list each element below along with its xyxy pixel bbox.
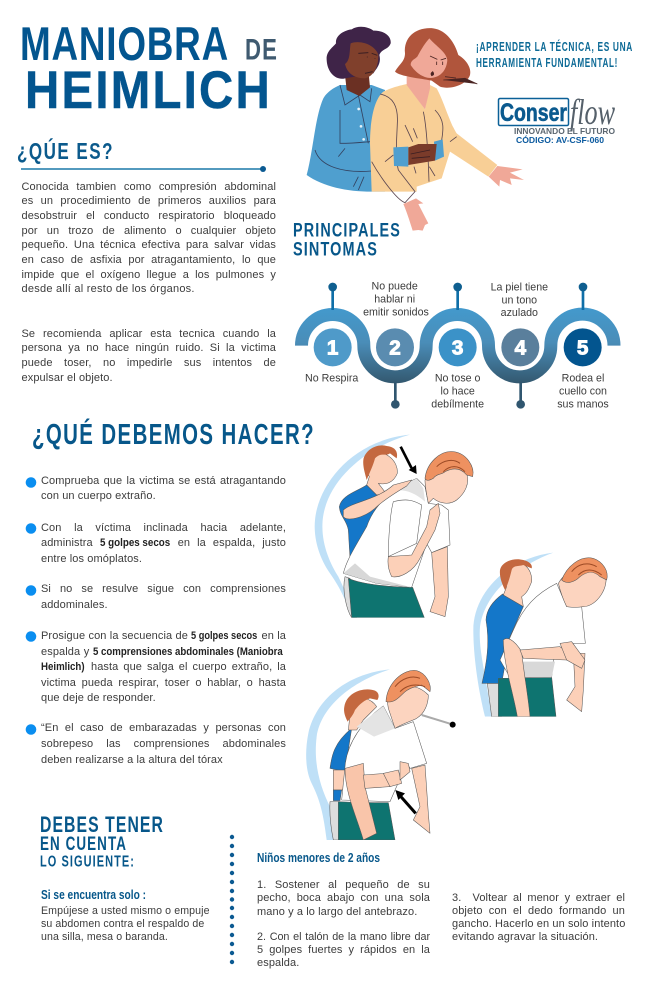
- step 3 text: [41, 583, 286, 611]
- text: alone: su abdomen contra el respaldo de: [41, 918, 204, 930]
- text: definition: por un trozo de alimento o cualquier objeto: [22, 225, 276, 237]
- chart: five symptoms timeline: Rodea el: [562, 373, 604, 385]
- step 5 text: [41, 722, 286, 766]
- step 1 text: Comprueba que la victima se está atragantando: [41, 475, 286, 487]
- step 4 text: victima pueda respirar, toser o hablar, o hasta: [41, 676, 286, 688]
- step 3 text: addominales.: [41, 599, 108, 611]
- step 4 text: Prosigue con la secuencia de en la: [41, 630, 286, 642]
- chart: five symptoms timeline: 5: [577, 337, 588, 360]
- title: Maniobra de Heimlich: MANIOBRA: [20, 17, 229, 70]
- logo: Conserflow: [498, 92, 615, 145]
- text: infants step 3: objeto con el dedo formando un: [452, 905, 625, 917]
- text: recommendation: persona ya no hace ningún ruido. Si la victima: [22, 342, 276, 354]
- step 5 text: “En el caso de embarazadas y personas con: [41, 722, 286, 734]
- step 4 text: Heimlich): [41, 661, 85, 673]
- heading: debes tener en cuenta: [40, 812, 164, 870]
- logo: Conserflow: INNOVANDO EL FUTURO: [514, 126, 615, 136]
- step 2 text: Con la víctima inclinada hacia adelante,: [41, 522, 286, 534]
- heading: principales sintomas: [293, 220, 401, 260]
- chart: five symptoms timeline: sus manos: [557, 398, 609, 410]
- text: definition: impide que el oxígeno llegue a los pulmones y: [22, 269, 276, 281]
- logo: Conserflow: flow: [570, 92, 615, 132]
- chart: five symptoms timeline: un tono: [502, 294, 537, 306]
- logo: Conserflow: Conser: [500, 99, 567, 127]
- text: infants step 2: 5 golpes fuertes y rápidos en la: [257, 944, 430, 956]
- title: Maniobra de Heimlich: HEIMLICH: [25, 61, 272, 120]
- heading: debes tener en cuenta: EN CUENTA: [40, 834, 127, 855]
- text: infants step 1: pecho, boca abajo con una sola: [257, 892, 430, 904]
- text: recommendation: expulsar el objeto.: [22, 372, 113, 384]
- illustration: second abdominal thrust: [306, 669, 456, 840]
- text: recommendation: [22, 328, 276, 384]
- text: infants step 3: 3. Voltear al menor y extraer el: [452, 892, 625, 904]
- text: definition: en caso de asfixia por atragantamiento, lo que: [22, 254, 276, 266]
- heading: principales sintomas: SINTOMAS: [293, 240, 378, 260]
- title: Maniobra de Heimlich: [20, 17, 278, 120]
- step 3 text: Si no se resulve sigue con comprensiones: [41, 583, 286, 595]
- bullets: step markers: [26, 477, 36, 735]
- step 1 text: [41, 475, 286, 502]
- text: alone: [41, 905, 210, 943]
- text: infants step 3: evitando agravar la situación.: [452, 931, 598, 943]
- text: definition: es un procedimiento de primeros auxilios para: [22, 195, 276, 207]
- step 2 text: administra en la espalda, justo: [41, 537, 286, 549]
- text: alone: Empújese a usted mismo o empuje: [41, 905, 210, 917]
- illustration: rescuer holding choking woman: [307, 27, 524, 231]
- chart: five symptoms timeline: 2: [389, 337, 401, 360]
- title: Maniobra de Heimlich: DE: [245, 34, 278, 66]
- divider: dotted column: [230, 835, 234, 964]
- text: recommendation: puede toser, no impedirle sus intentos de: [22, 357, 276, 369]
- heading: que es: [17, 137, 266, 172]
- heading: debes tener en cuenta: DEBES TENER: [40, 812, 164, 837]
- chart: five symptoms timeline: hablar ni: [374, 294, 415, 306]
- heading: principales sintomas: PRINCIPALES: [293, 220, 401, 242]
- step 4 text: 5 comprensiones abdominales (Maniobra: [93, 646, 283, 658]
- text: definition: [22, 180, 276, 295]
- text: infants step 1: 1. Sostener al pequeño de su: [257, 878, 430, 890]
- step 2 text: 5 golpes secos: [100, 537, 170, 549]
- step 2 text: entre los omóplatos.: [41, 553, 142, 565]
- step 4 text: espalda y: [41, 646, 89, 658]
- step 4 text: que deje de responder.: [41, 692, 156, 704]
- step 4 text: hasta que salga el cuerpo extraño, la: [91, 661, 286, 673]
- text: infants step 2: espalda.: [257, 957, 299, 969]
- logo: Conserflow: CÓDIGO: AV-CSF-060: [516, 134, 604, 145]
- chart: five symptoms timeline: 3: [452, 337, 463, 360]
- text: definition: desde allí al resto de los órganos.: [22, 283, 195, 295]
- text: infants step 1: mano y a lo largo del antebrazo.: [257, 906, 417, 918]
- heading: debes tener en cuenta: LO SIGUIENTE:: [40, 854, 135, 870]
- heading: que debemos hacer: ¿QUÉ DEBEMOS HACER?: [32, 417, 315, 451]
- chart: five symptoms timeline: La piel tiene: [491, 281, 548, 293]
- text: infants step 2: 2. Con el talón de la mano libre dar: [257, 931, 430, 943]
- text: definition: desobstruir el conducto respiratorio bloqueado: [22, 210, 276, 222]
- heading: que es: ¿QÚE ES?: [17, 137, 114, 164]
- chart: five symptoms timeline: 4: [515, 337, 527, 360]
- text: recommendation: Se recomienda aplicar esta tecnica cuando la: [22, 328, 276, 340]
- step 4 text: 5 golpes secos: [191, 630, 258, 642]
- step 1 text: con un cuerpo extraño.: [41, 490, 156, 502]
- text: definition: pequeño. Una técnica efectiva para salvar vidas: [22, 239, 276, 251]
- callout: aprender la tecnica: [476, 39, 633, 70]
- text: infants step 3: [452, 892, 625, 943]
- text: infants step 2: [257, 931, 430, 969]
- chart: five symptoms timeline: No tose o: [435, 373, 481, 385]
- chart: five symptoms timeline: No Respira: [305, 373, 358, 385]
- text: infants step 3: gancho. Hacerlo en un solo intento: [452, 918, 625, 930]
- step 2 text: [41, 522, 286, 565]
- chart: five symptoms timeline: No puede: [372, 281, 418, 293]
- chart: five symptoms timeline: emitir sonidos: [363, 306, 429, 318]
- subheading: si se encuentra solo: Si se encuentra solo :: [41, 888, 146, 902]
- illustration: first abdominal thrust: [473, 553, 607, 717]
- chart: five symptoms timeline: [301, 281, 614, 410]
- step 5 text: deben realizarse a la altura del tórax: [41, 754, 223, 766]
- chart: five symptoms timeline: lo hace: [440, 386, 475, 398]
- text: infants step 1: [257, 878, 430, 918]
- step 5 text: sobrepeso las comprensiones abdominales: [41, 738, 286, 750]
- chart: five symptoms timeline: cuello con: [559, 386, 607, 398]
- illustration: back blows: [315, 435, 473, 618]
- chart: five symptoms timeline: 1: [327, 337, 338, 360]
- subheading: ninos menores de 2 anos: Niños menores de 2 años: [257, 851, 380, 865]
- text: alone: una silla, mesa o baranda.: [41, 931, 168, 943]
- text: definition: Conocida tambien como compresión abdominal: [22, 180, 276, 192]
- chart: five symptoms timeline: azulado: [501, 307, 538, 319]
- step 4 text: [41, 630, 286, 704]
- chart: five symptoms timeline: debílmente: [431, 398, 484, 410]
